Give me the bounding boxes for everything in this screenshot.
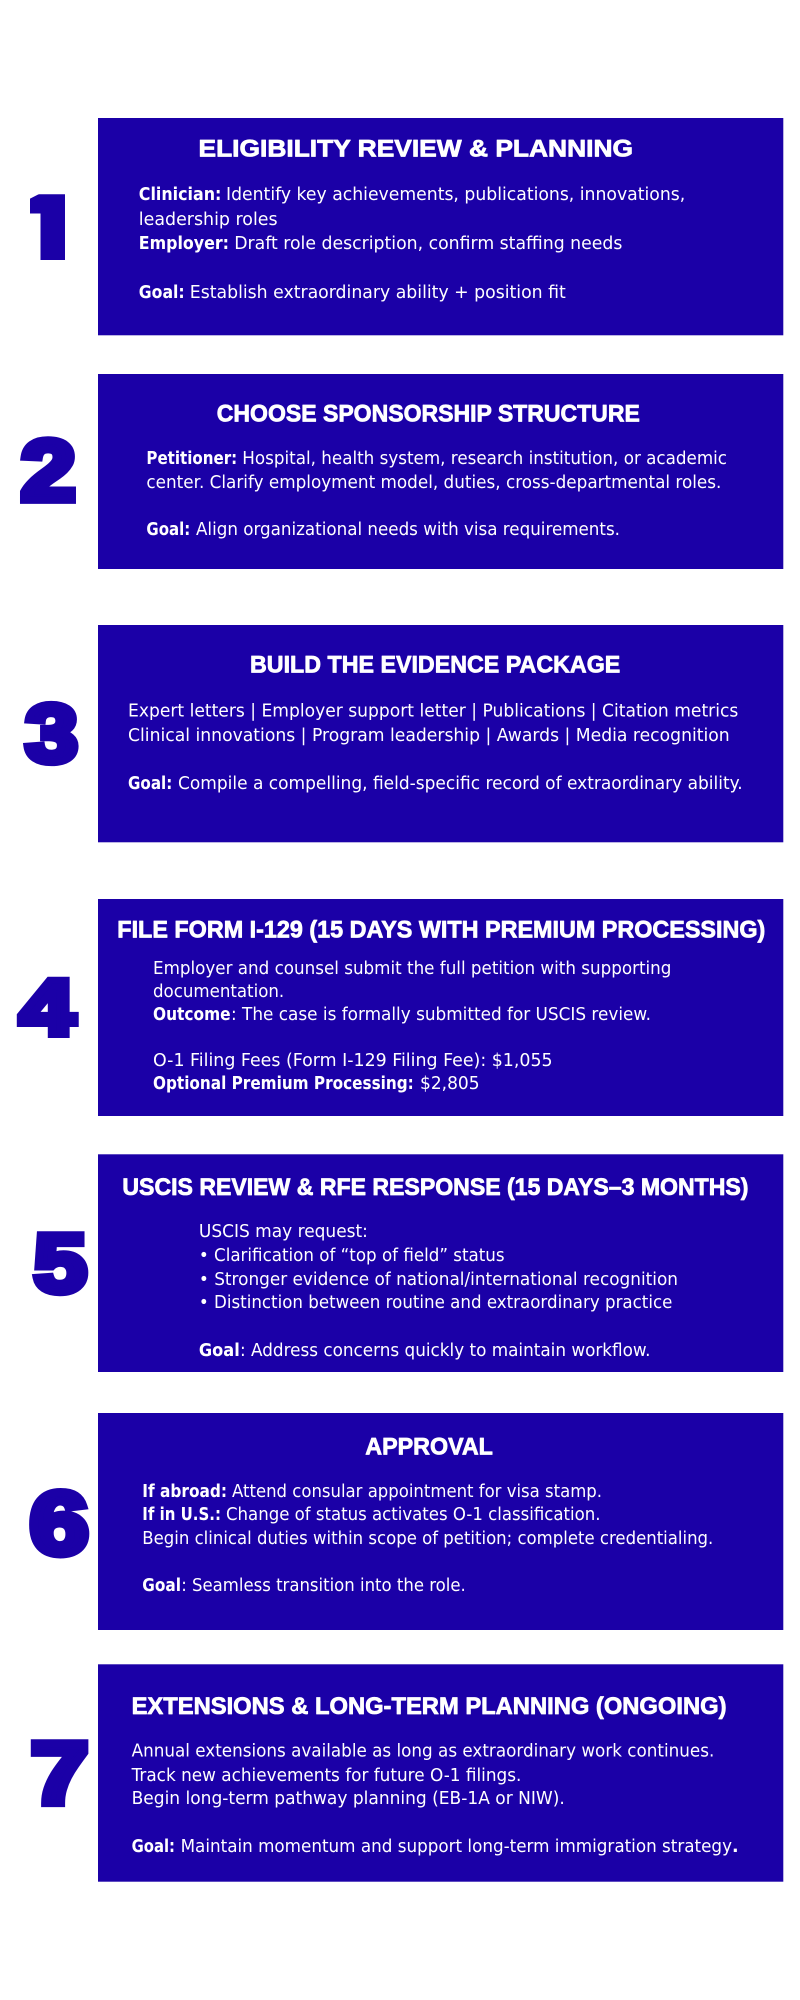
text block: step 3 details: Compile a compelling, field-specific record of extraordinary ability. [178, 774, 743, 794]
text block: step 7 details: Maintain momentum and support long-term immigration strategy [181, 1837, 732, 1857]
text block: step 2 details: Petitioner: [146, 449, 237, 469]
text block: step 5 details: Goal [199, 1341, 240, 1361]
text block: step 1 details: leadership roles [139, 210, 278, 230]
text block: step 6 details: Goal [142, 1576, 181, 1596]
text block: step 1 details: Draft role description, confirm staffing needs [234, 234, 622, 254]
text block: step 4 details: Optional Premium Processing: [153, 1074, 414, 1094]
panel: step 5 USCIS review and RFE response [98, 1154, 783, 1372]
text block: step 6 details: If abroad: [142, 1482, 227, 1502]
text block: step 2 details: Align organizational needs with visa requirements. [196, 520, 620, 540]
text block: step 5 details: • Stronger evidence of national/international recognition [199, 1270, 678, 1290]
text block: step 6 details: If in U.S.: [142, 1505, 221, 1525]
text block: step 2 details: Goal: [146, 520, 190, 540]
text block: step 4 details [153, 959, 671, 1094]
text block: step 7 details: Annual extensions available as long as extraordinary work continues. [132, 1742, 714, 1762]
text block: step 6 details: Attend consular appointment for visa stamp. [232, 1482, 602, 1502]
text block: step 5 details [199, 1222, 678, 1361]
text block: step 2 details: Hospital, health system, research institution, or academic [242, 449, 727, 469]
step number 2: 2 [21, 424, 76, 519]
text block: step 3 details: Goal: [128, 774, 172, 794]
step number 7: 7 [31, 1725, 88, 1822]
panel: step 1 eligibility review and planning [98, 118, 783, 335]
text block: step 1 details [139, 185, 685, 303]
step number 4: 4 [20, 963, 75, 1051]
text block: step 3 details: Clinical innovations | Program leadership | Awards | Media recognition [128, 726, 730, 746]
text block: step 7 details: Goal: [132, 1837, 175, 1857]
text block: step 6 details: Change of status activates O-1 classification. [226, 1505, 600, 1525]
heading: step 3: BUILD THE EVIDENCE PACKAGE [250, 652, 620, 679]
text block: step 3 details: Expert letters | Employer support letter | Publications | Citation metrics [128, 702, 738, 722]
text block: step 7 details: Begin long-term pathway planning (EB-1A or NIW). [132, 1789, 565, 1809]
text block: step 5 details: USCIS may request: [199, 1222, 368, 1242]
panel: step 7 extensions and long-term planning [98, 1664, 783, 1882]
text block: step 4 details: O-1 Filing Fees (Form I-129 Filing Fee): $1,055 [153, 1051, 553, 1071]
text block: step 7 details: Track new achievements for future O-1 filings. [131, 1766, 521, 1786]
heading: step 2: CHOOSE SPONSORSHIP STRUCTURE [217, 401, 640, 428]
step number 3: 3 [26, 687, 78, 779]
step number 1: 1 [23, 181, 84, 277]
heading: step 5: USCIS REVIEW & RFE RESPONSE (15 DAYS–3 MONTHS) [122, 1174, 748, 1201]
text block: step 4 details: documentation. [153, 982, 284, 1002]
text block: step 4 details: : The case is formally submitted for USCIS review. [231, 1005, 651, 1025]
text block: step 1 details: Employer: [139, 234, 229, 254]
text block: step 5 details: : Address concerns quickly to maintain workflow. [240, 1341, 650, 1361]
panel: step 6 approval [98, 1413, 783, 1630]
heading: step 6: APPROVAL [365, 1433, 493, 1460]
heading: step 4: FILE FORM I-129 (15 DAYS WITH PREMIUM PROCESSING) [117, 916, 765, 943]
panel: step 3 build the evidence package [98, 625, 783, 842]
step number 5: 5 [34, 1216, 87, 1309]
text block: step 6 details: : Seamless transition into the role. [181, 1576, 466, 1596]
text block: step 1 details: Identify key achievements, publications, innovations, [226, 185, 685, 205]
text block: step 1 details: Goal: [139, 283, 185, 303]
text block: step 4 details: Outcome [153, 1005, 231, 1025]
panel: step 4 file form I-129 [98, 899, 783, 1116]
panel: step 2 choose sponsorship structure [98, 374, 783, 569]
heading: step 7: EXTENSIONS & LONG-TERM PLANNING (ONGOING) [132, 1693, 727, 1720]
text block: step 6 details: Begin clinical duties within scope of petition; complete credentialing. [142, 1529, 713, 1549]
text block: step 4 details: $2,805 [420, 1074, 480, 1094]
text block: step 2 details [146, 449, 727, 540]
step number 6: 6 [30, 1474, 88, 1573]
text block: step 4 details: Employer and counsel submit the full petition with supporting [153, 959, 671, 979]
heading: step 1: ELIGIBILITY REVIEW & PLANNING [198, 136, 633, 163]
text block: step 6 details [142, 1482, 713, 1596]
text block: step 5 details: • Clarification of “top of field” status [199, 1246, 505, 1266]
text block: step 7 details: . [732, 1837, 739, 1857]
text block: step 1 details: Clinician: [139, 185, 221, 205]
text block: step 2 details: center. Clarify employment model, duties, cross-departmental roles. [146, 473, 721, 493]
text block: step 5 details: • Distinction between routine and extraordinary practice [199, 1293, 672, 1313]
text block: step 3 details [128, 702, 743, 794]
text block: step 7 details [131, 1742, 739, 1857]
text block: step 1 details: Establish extraordinary ability + position fit [190, 283, 566, 303]
